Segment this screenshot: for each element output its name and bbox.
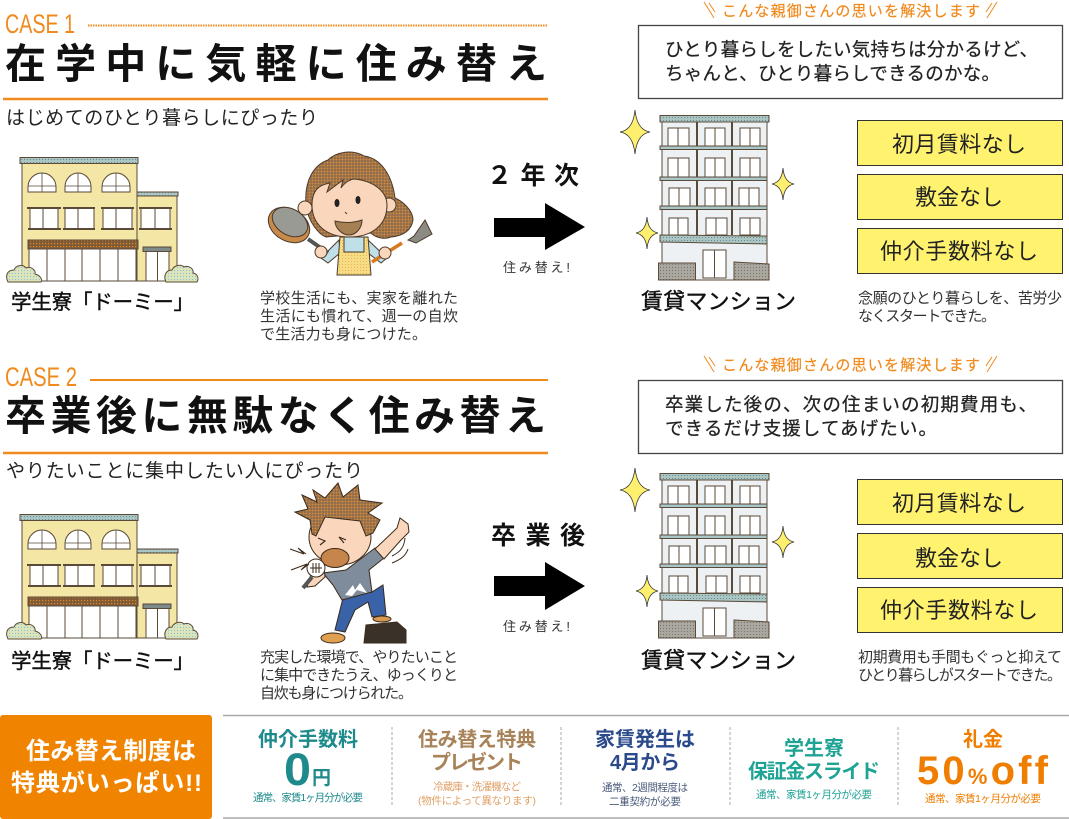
benefit boxes case 2 [858,480,1062,632]
callout box case 2: できるだけ支援してあげたい。 [665,418,937,439]
benefit: deposit slide [748,737,880,801]
callout header case 1: こんな親御さんの思いを解決します [722,3,980,20]
callout box case 2 [638,380,1062,454]
benefit: deposit slide: 通常、家賃1ヶ月分が必要 [756,788,872,801]
benefit: agency fee zero: 円 [312,768,331,789]
case 1 woman caption: 学校生活にも、実家を離れた [260,290,458,307]
benefit: agency fee zero: 通常、家賃1ヶ月分が必要 [253,791,364,804]
result caption case 1: なくスタートできた。 [858,308,996,325]
case 1 woman caption [260,290,458,343]
step heading: after graduation: 卒業後 [491,522,585,550]
illustration: woman with frying pan [262,152,432,275]
benefit boxes case 1: 仲介手数料なし [880,239,1038,264]
case 1 title: 在学中に気軽に住み替え [5,41,547,87]
dormitory label case 1: 学生寮「ドーミー」 [11,291,194,314]
benefit: rent starts in April: 家賃発生は [595,728,695,751]
case 2 label: CASE 2 [5,362,77,392]
benefit: moving gift: (物件によって異なります) [418,794,536,807]
benefit boxes case 1 [858,120,1062,274]
benefit boxes case 1: 初月賃料なし [892,132,1026,157]
benefit: rent starts in April: 通常、2週間程度は [602,781,688,794]
panel: case 1 heading [3,9,548,129]
benefit: agency fee zero: 0 [284,744,311,795]
benefit boxes case 2: 敷金なし [915,546,1003,571]
benefit: agency fee zero [253,728,364,804]
orange badge: benefits headline: 特典がいっぱい!! [11,769,202,797]
case 2 man caption: 充実した環境で、やりたいこと [260,649,458,666]
benefit boxes case 2: 仲介手数料なし [880,598,1038,623]
benefits strip frame [223,716,1069,818]
arrow [494,562,585,610]
sparkles case 2 [620,468,794,607]
benefit: moving gift: 冷蔵庫・洗濯機など [433,780,522,793]
result caption case 2: ひとり暮らしがスタートできた。 [858,667,1062,684]
illustration: student dormitory case 1 [7,158,198,282]
case 2 man caption: 自炊も身につけられた。 [260,685,413,702]
benefit: moving gift [418,728,536,807]
illustration: shouting man with microphone [290,483,409,643]
apartment label case 1: 賃貸マンション [641,289,796,314]
illustration: student dormitory case 2 [7,514,198,639]
benefit: agency fee zero: 仲介手数料 [258,728,358,751]
benefit: key money 50 percent off: 通常、家賃1ヶ月分が必要 [925,792,1042,805]
callout box case 1 [638,26,1062,98]
benefit: key money 50 percent off: 礼金 [963,728,1003,751]
move caption: 住み替え! [503,260,570,275]
illustration: apartment building case 2 [658,474,769,638]
benefit: rent starts in April: 二重契約が必要 [609,795,682,808]
result caption case 1: 念願のひとり暮らしを、苦労少 [858,290,1062,307]
arrow [494,203,585,250]
sparkles case 1 [620,110,794,249]
benefit: key money 50 percent off [917,728,1049,805]
benefit: moving gift: プレゼント [431,750,523,774]
orange badge: benefits headline: 住み替え制度は [26,738,196,765]
case 1 label: CASE 1 [5,9,75,39]
result caption case 2: 初期費用も手間もぐっと抑えて [858,649,1062,666]
result caption case 1 [858,290,1062,325]
case 1 woman caption: 生活にも慣れて、週一の自炊 [260,307,458,325]
benefit: rent starts in April: 4月から [610,752,680,774]
panel: case 2 heading [3,362,548,482]
case 2 man caption: に集中できたうえ、ゆっくりと [260,667,458,684]
benefit: deposit slide: 学生寮 [784,737,844,760]
move caption: 住み替え! [503,619,570,634]
benefit: key money 50 percent off: 50%off [917,749,1049,793]
result caption case 2 [858,649,1062,684]
case 1 woman caption: で生活力も身につけた。 [260,326,427,343]
benefit: deposit slide: 保証金スライド [748,760,880,783]
dormitory label case 2: 学生寮「ドーミー」 [11,650,194,673]
illustration: apartment building case 1 [658,116,769,280]
case 2 subtitle: やりたいことに集中したい人にぴったり [6,460,363,482]
arrow group case 2 [491,522,585,634]
benefit: rent starts in April [595,728,695,808]
callout header case 2: こんな親御さんの思いを解決します [722,357,980,374]
orange badge: benefits headline [0,715,212,819]
step heading: second year: ２年次 [487,162,579,190]
callout box case 1: ひとり暮らしをしたい気持ちは分かるけど、 [665,39,1038,60]
apartment label case 2: 賃貸マンション [641,648,796,673]
callout box case 2: 卒業した後の、次の住まいの初期費用も、 [665,394,1037,415]
arrow group case 1 [487,162,585,275]
case 2 man caption [260,649,458,702]
benefit boxes case 2: 初月賃料なし [892,491,1026,516]
case 1 subtitle: はじめてのひとり暮らしにぴったり [6,107,318,129]
case 2 title: 卒業後に無駄なく住み替え [5,393,546,439]
benefit: moving gift: 住み替え特典 [418,728,536,751]
callout box case 1: ちゃんと、ひとり暮らしできるのかな。 [665,63,1000,84]
benefit boxes case 1: 敷金なし [915,185,1003,210]
